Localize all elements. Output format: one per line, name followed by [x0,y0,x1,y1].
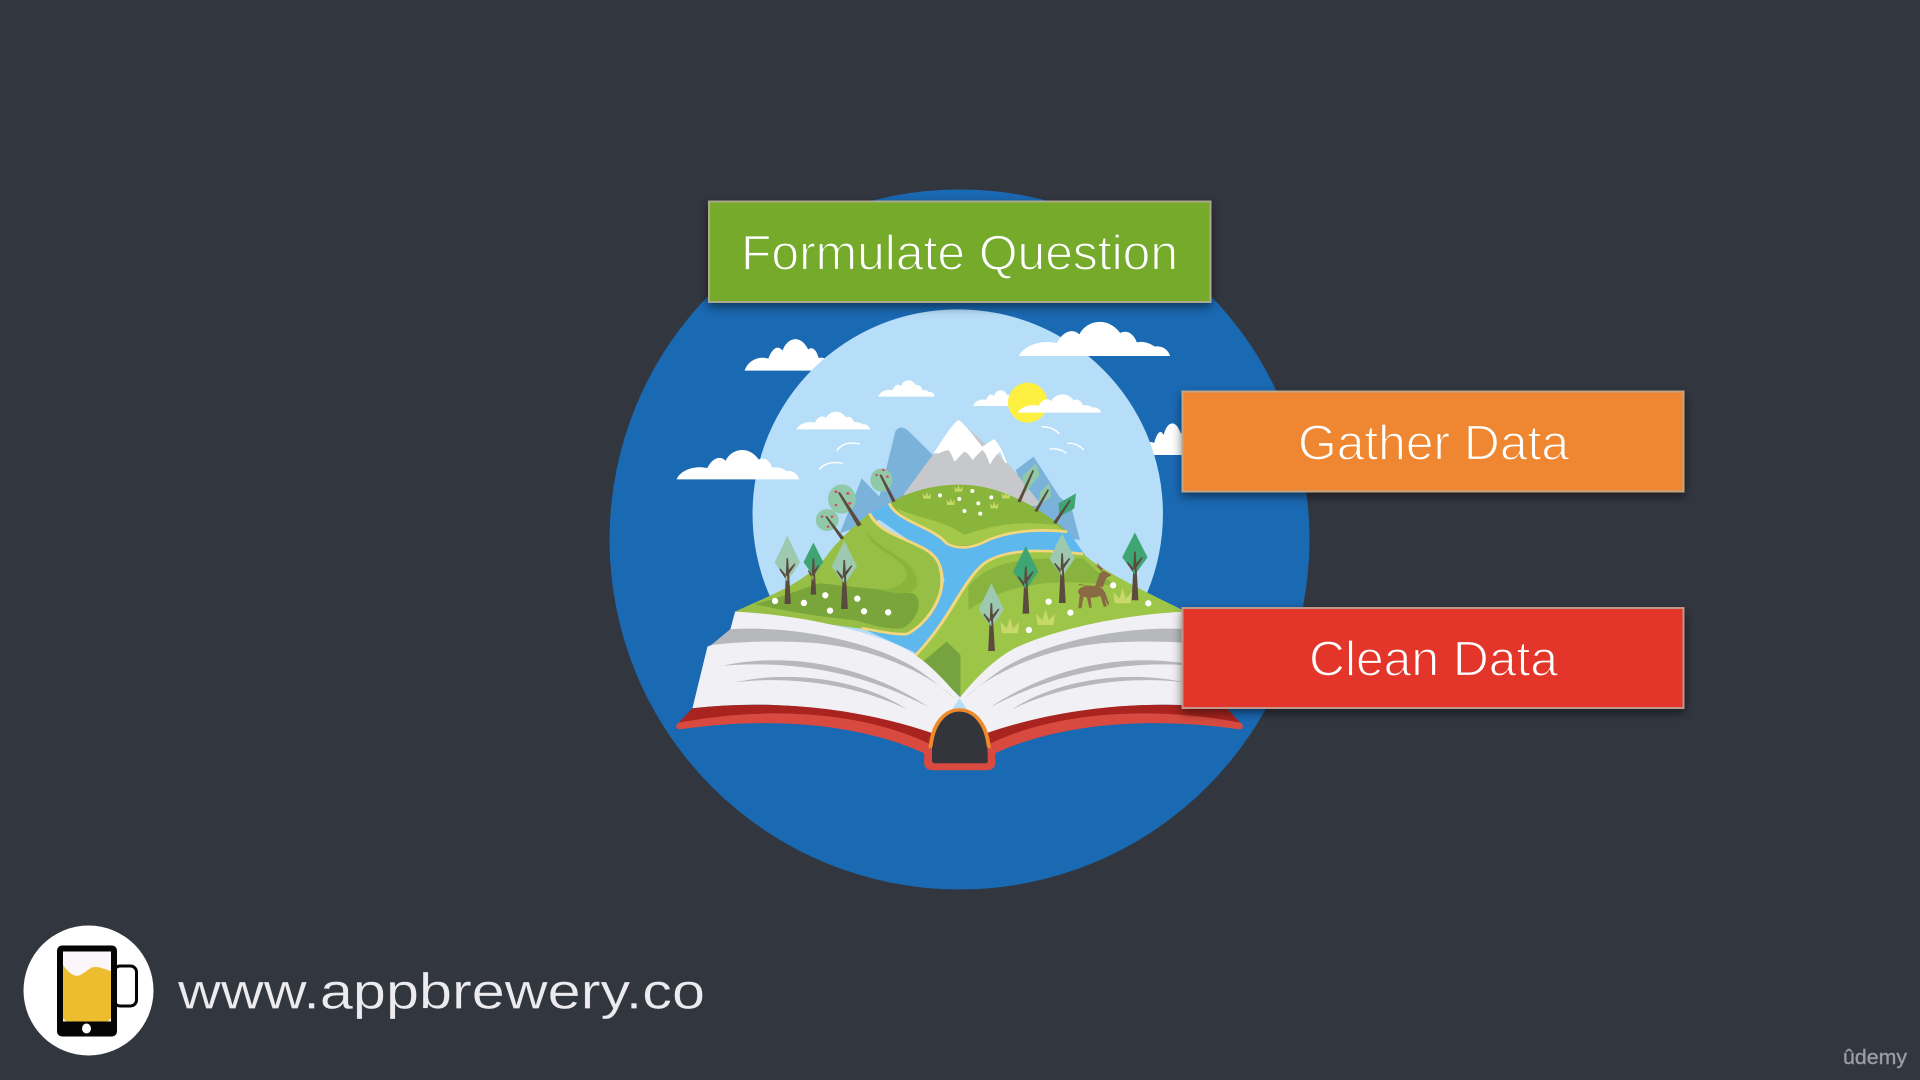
grass tufts [923,484,1132,633]
open book pages and cover, left half [676,612,960,754]
box: Gather Data [1182,392,1684,492]
river [862,503,1085,657]
box: Formulate Question [709,202,1210,302]
logo: beer mug phone [24,926,154,1056]
round and tilted trees [816,463,1076,540]
mountains [840,420,1080,540]
open book pages and cover, right half [959,612,1243,754]
mug handle [114,966,136,1006]
clouds [677,322,1170,479]
udemy watermark: ûdemy [1843,1047,1907,1069]
phone button [82,1024,91,1034]
back hill [889,485,1067,547]
deer [1078,563,1112,608]
back hill river bank [889,503,1067,547]
right hill river bank [915,551,1083,656]
phone screen foam [63,952,111,1022]
big blue circle [610,190,1310,890]
phone body [57,946,117,1036]
sun [1008,383,1047,423]
right hill [915,551,1186,697]
left hill river bank [862,513,942,634]
book spine [924,710,995,770]
beer [63,965,111,1022]
cloud over sun [1018,394,1101,413]
sky disc [753,309,1163,719]
label: Clean Data: Clean Data [1309,632,1558,686]
clouds behind sky disc [745,339,1202,455]
website url: www.appbrewery.co [177,964,705,1020]
left hill [735,513,942,634]
label: Formulate Question: Formulate Question [741,226,1178,280]
book illustration [676,309,1243,770]
pine trees [775,532,1148,651]
box: Clean Data [1182,608,1684,708]
label: Gather Data: Gather Data [1298,416,1569,470]
birds [819,427,1084,469]
flowers [772,489,1151,633]
